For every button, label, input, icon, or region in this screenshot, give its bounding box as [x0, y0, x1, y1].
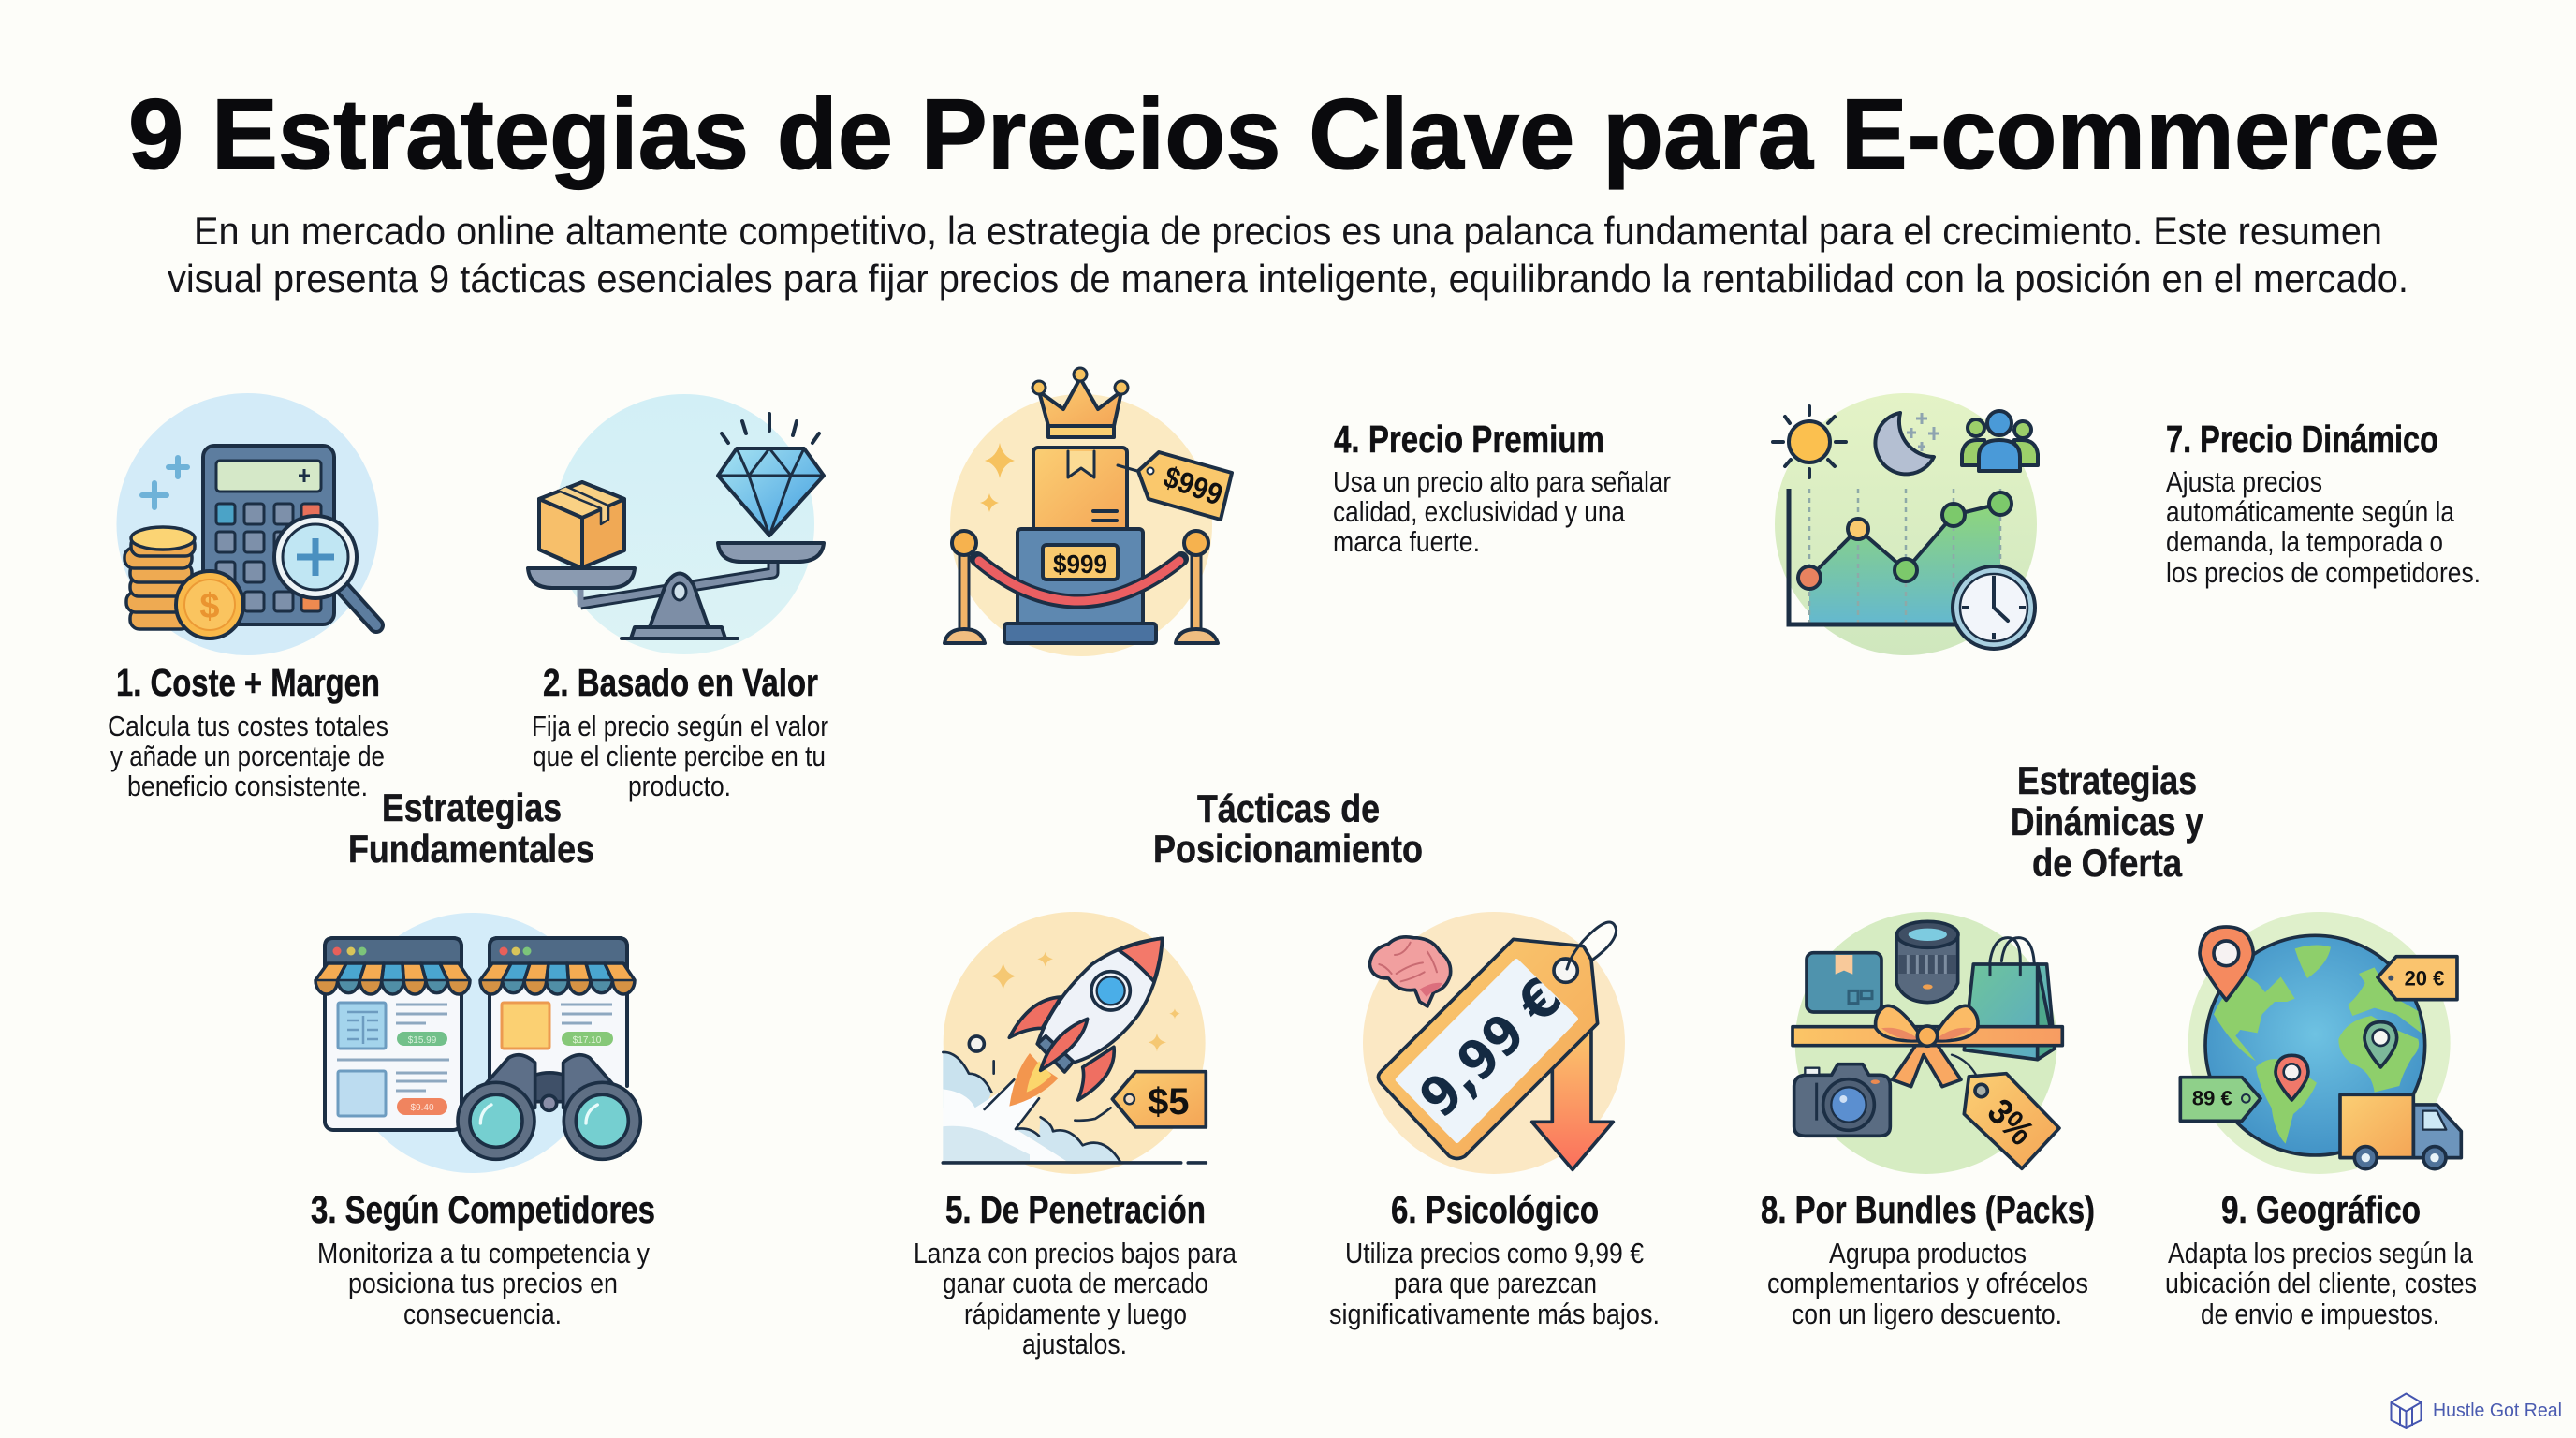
- group heading: fundamentals: Fundamentales: [348, 827, 594, 871]
- description: que el cliente percibe en tu: [533, 740, 826, 772]
- description: Agrupa productos: [1829, 1237, 2027, 1269]
- panel: strategy 5 penetration: [914, 912, 1237, 1360]
- panel: strategy 6 psychological: [1329, 912, 1660, 1330]
- logo: Hustle Got Real watermark: [2391, 1393, 2562, 1428]
- icon: crown, box on pedestal, velvet rope: $999: [1053, 550, 1107, 579]
- group heading: positioning tactics: Tácticas de: [1197, 786, 1380, 830]
- group heading: positioning tactics: Posicionamiento: [1153, 827, 1423, 871]
- panel: strategy 8 bundles: [1761, 912, 2095, 1330]
- logo: Hustle Got Real watermark: Hustle Got Real: [2433, 1400, 2562, 1421]
- panel: strategy 9 geographic: [2165, 912, 2477, 1330]
- panel: strategy 1 cost plus margin: [108, 393, 388, 802]
- description: Calcula tus costes totales: [108, 710, 388, 742]
- icon: crown, box on pedestal, velvet rope: $999: [1160, 460, 1227, 512]
- description: [2166, 465, 2481, 589]
- description: y añade un porcentaje de: [110, 740, 385, 772]
- description: [1333, 465, 1671, 558]
- intro text: En un mercado online altamente competitivo, la estrategia de precios es una palanca fundamental para el crecimiento. Este resumen: [194, 209, 2382, 253]
- heading: 1. Coste + Margen: [116, 661, 380, 704]
- icon: rocket launch with price tag: [943, 912, 1206, 1174]
- group heading: dynamic and offer strategies: de Oferta: [2032, 841, 2183, 885]
- description: Monitoriza a tu competencia y: [317, 1237, 650, 1269]
- description: complementarios y ofrécelos: [1767, 1267, 2088, 1299]
- icon: box, lens, bag, camera tied with ribbon and tag: 3%: [1980, 1091, 2042, 1153]
- icon: box, lens, bag, camera tied with ribbon and tag: [1793, 912, 2062, 1174]
- heading: 8. Por Bundles (Packs): [1761, 1188, 2095, 1231]
- panel: strategy 3 competitors: [311, 913, 655, 1330]
- description: para que parezcan: [1394, 1267, 1597, 1299]
- description: producto.: [628, 770, 731, 802]
- description: ganar cuota de mercado: [943, 1267, 1208, 1299]
- icon: 9,99 euro tag with brain and down arrow: [1363, 912, 1625, 1174]
- description: marca fuerte.: [1333, 525, 1480, 558]
- title: 9 Estrategias de Precios Clave para E-commerce: [128, 78, 2439, 190]
- description: significativamente más bajos.: [1329, 1298, 1660, 1330]
- description: Ajusta precios: [2166, 465, 2322, 498]
- description: rápidamente y luego: [964, 1298, 1187, 1330]
- description: automáticamente según la: [2166, 495, 2455, 528]
- description: [1329, 1237, 1660, 1330]
- group heading: dynamic and offer strategies: Dinámicas y: [2011, 800, 2204, 844]
- group heading: dynamic and offer strategies: [2011, 758, 2204, 885]
- group heading: positioning tactics: [1153, 786, 1423, 871]
- description: [2165, 1237, 2477, 1330]
- intro text: visual presenta 9 tácticas esenciales para fijar precios de manera inteligente, equilibrando la rentabilidad con la posición en el mercado.: [168, 257, 2408, 301]
- description: Adapta los precios según la: [2168, 1237, 2474, 1269]
- icon: calculator, coins and magnifier: $: [199, 587, 220, 626]
- description: Fija el precio según el valor: [532, 710, 828, 742]
- heading: 9. Geográfico: [2221, 1188, 2421, 1231]
- heading: 4. Precio Premium: [1334, 418, 1604, 461]
- group heading: fundamentals: Estrategias: [382, 785, 562, 829]
- heading: 5. De Penetración: [945, 1188, 1206, 1231]
- icon: globe with pins, price tags and truck: 89 €: [2192, 1087, 2232, 1110]
- icon: two shop browser windows and binoculars: [315, 913, 640, 1173]
- icon: globe with pins, price tags and truck: 20 €: [2405, 966, 2444, 990]
- group heading: fundamentals: [348, 785, 594, 871]
- description: [914, 1237, 1237, 1360]
- heading: 3. Según Competidores: [311, 1188, 655, 1231]
- description: de envio e impuestos.: [2201, 1298, 2439, 1330]
- description: Utiliza precios como 9,99 €: [1345, 1237, 1644, 1269]
- description: calidad, exclusividad y una: [1333, 495, 1626, 528]
- icon: sun, moon, people, line chart and clock: [1773, 393, 2038, 655]
- description: consecuencia.: [403, 1298, 562, 1330]
- panel: strategy 2 value based: [528, 394, 828, 802]
- heading: 2. Basado en Valor: [543, 661, 818, 704]
- description: Usa un precio alto para señalar: [1333, 465, 1671, 498]
- description: ubicación del cliente, costes: [2165, 1267, 2477, 1299]
- description: Lanza con precios bajos para: [914, 1237, 1237, 1269]
- heading: 6. Psicológico: [1391, 1188, 1599, 1231]
- heading: 7. Precio Dinámico: [2166, 418, 2438, 461]
- group heading: dynamic and offer strategies: Estrategias: [2017, 758, 2197, 802]
- icon: two shop browser windows and binoculars: $9.40: [410, 1103, 434, 1113]
- icon: 9,99 euro tag with brain and down arrow: 9,99 €: [1408, 966, 1573, 1129]
- description: [532, 710, 828, 802]
- description: los precios de competidores.: [2166, 556, 2481, 589]
- icon: two shop browser windows and binoculars: $17.10: [573, 1035, 602, 1046]
- icon: two shop browser windows and binoculars: $15.99: [408, 1035, 437, 1046]
- icon: rocket launch with price tag: $5: [1148, 1081, 1190, 1123]
- description: [1767, 1237, 2088, 1330]
- intro text: [168, 209, 2408, 301]
- description: ajustalos.: [1022, 1328, 1127, 1360]
- description: demanda, la temporada o: [2166, 525, 2443, 558]
- panel: strategy 7 dynamic: [1773, 393, 2481, 655]
- description: con un ligero descuento.: [1792, 1298, 2062, 1330]
- description: [317, 1237, 650, 1330]
- icon: balance scale with box and diamond: [528, 394, 824, 654]
- description: beneficio consistente.: [127, 770, 368, 802]
- description: [108, 710, 388, 802]
- panel: strategy 4 premium: [944, 368, 1671, 656]
- icon: calculator, coins and magnifier: [116, 393, 378, 655]
- icon: crown, box on pedestal, velvet rope: [944, 368, 1232, 656]
- description: posiciona tus precios en: [348, 1267, 618, 1299]
- icon: globe with pins, price tags and truck: [2180, 912, 2461, 1174]
